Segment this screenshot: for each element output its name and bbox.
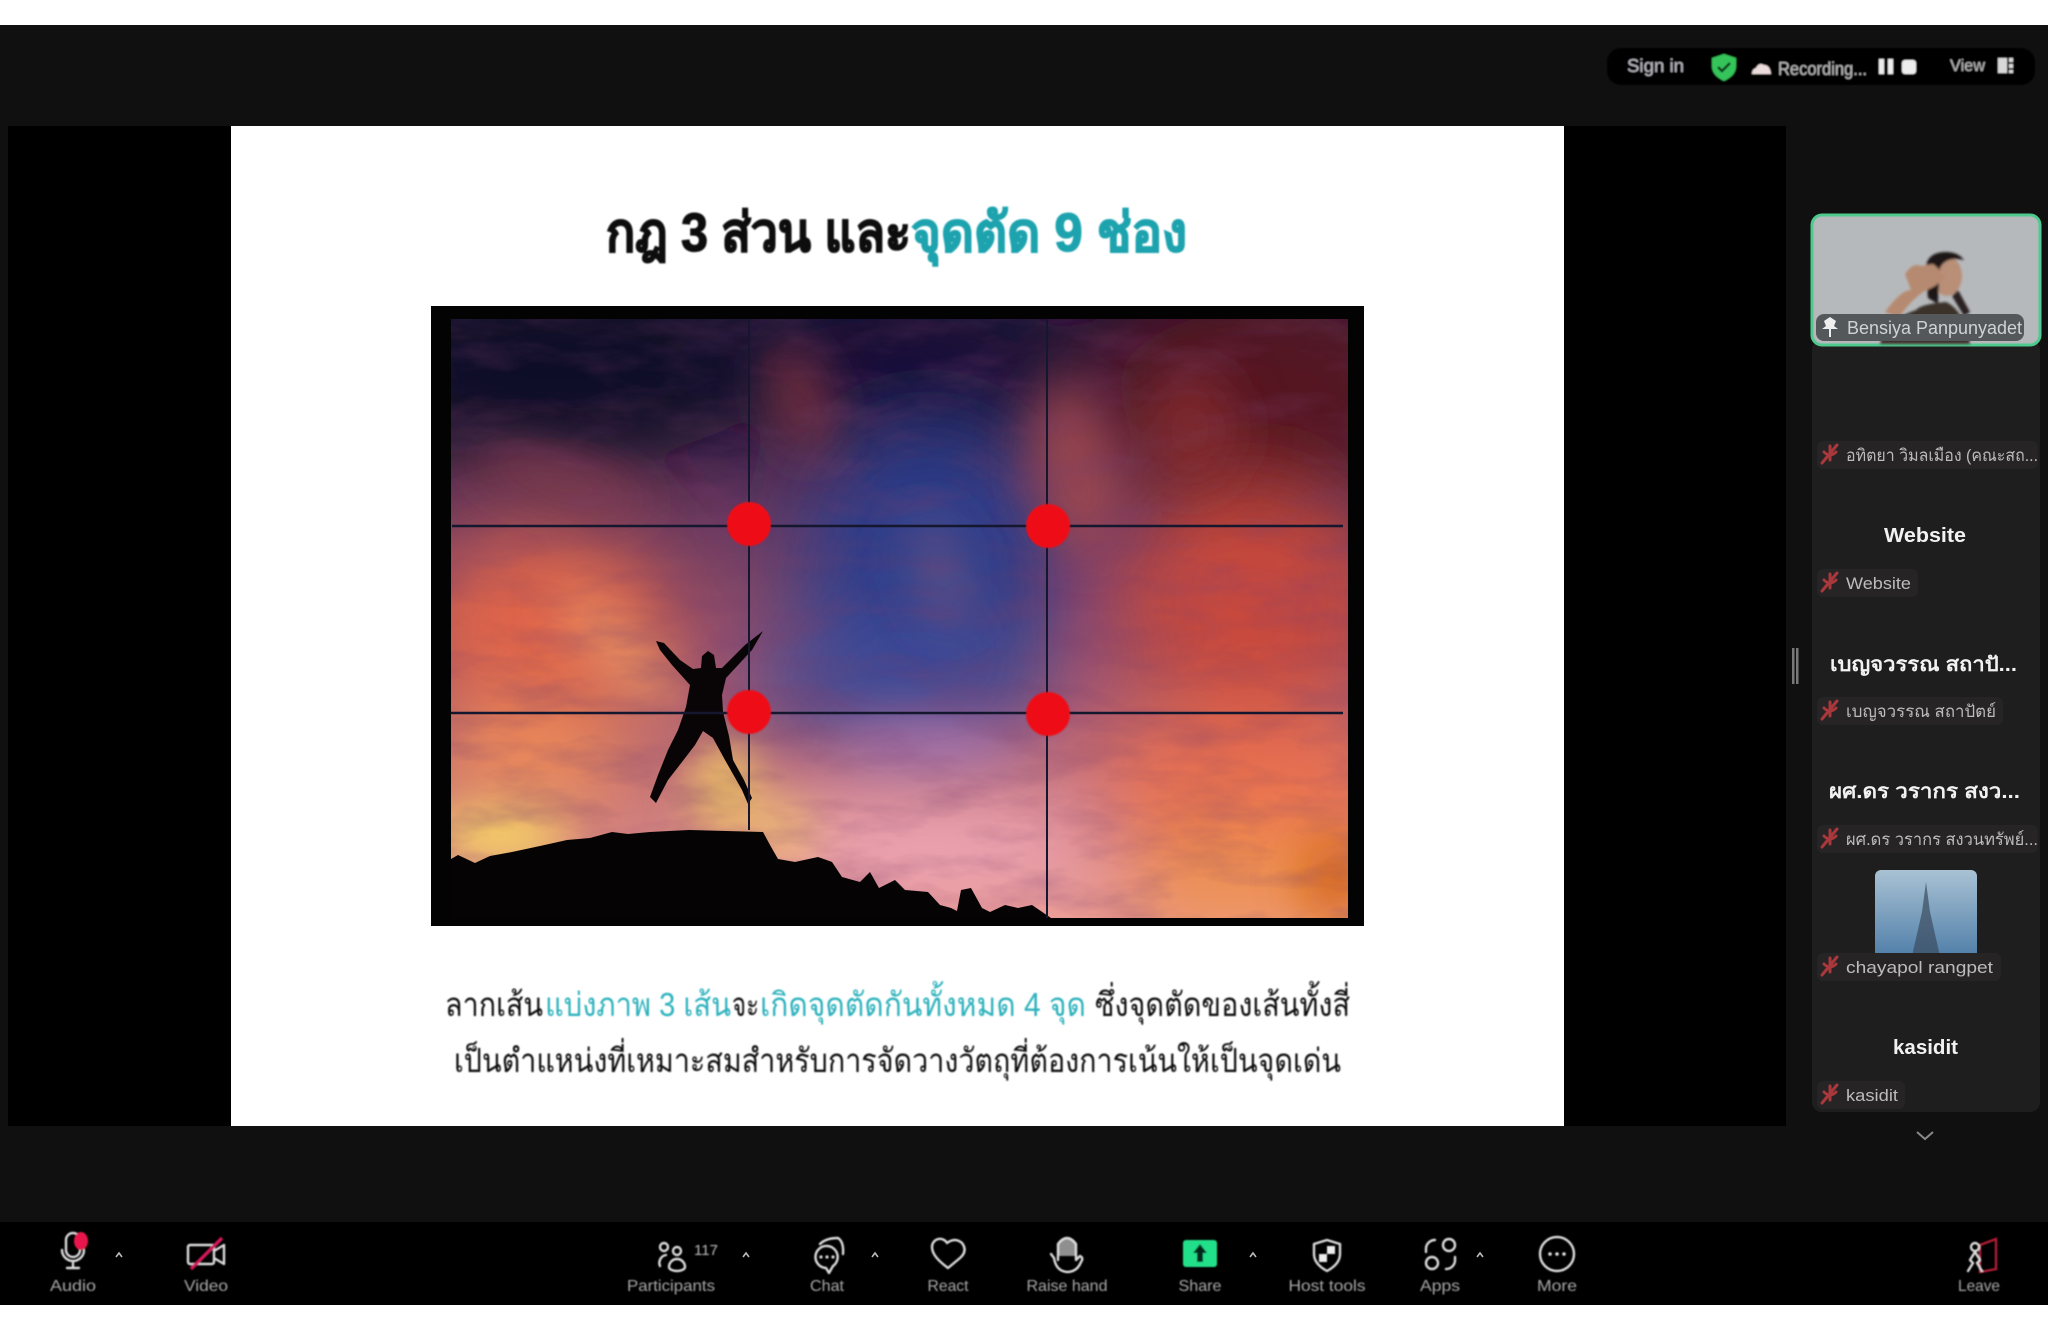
video button	[184, 1238, 228, 1295]
top status bar	[1607, 48, 2035, 85]
slide title: กฎ 3 ส่วน และ	[606, 203, 911, 263]
hill silhouette	[451, 830, 1051, 925]
share caret	[1250, 1253, 1256, 1257]
view label: View	[1950, 56, 1986, 75]
audio button	[50, 1232, 96, 1295]
slide panel	[231, 126, 1564, 1126]
pinned speaker video	[1812, 215, 2040, 345]
participant tile: Warakorn: ผศ.ดร วรากร สงว...	[1829, 781, 2020, 803]
participant tile: Benjawan: เบญจวรรณ สถาปั...	[1830, 654, 2017, 676]
chat button	[810, 1238, 845, 1295]
thirds grid lines	[451, 319, 1343, 918]
recording label: Recording...	[1778, 59, 1867, 79]
participant tile: Atittaya: อทิตยา วิมลเมือง (คณะสถ...	[1846, 446, 2038, 465]
slide caption: จะ	[732, 986, 759, 1023]
chat button: Chat	[810, 1278, 845, 1295]
slide caption	[445, 981, 1350, 1081]
participant tile: chayapol	[1817, 870, 2001, 981]
react button	[928, 1239, 969, 1295]
shared screen area	[8, 126, 1786, 1126]
participants button: 117	[694, 1242, 718, 1259]
participant tile: chayapol: chayapol rangpet	[1846, 958, 1993, 977]
sign in: Sign in	[1627, 56, 1684, 76]
react button: React	[928, 1278, 969, 1295]
share button	[1178, 1240, 1222, 1295]
participant tile: kasidit: kasidit	[1846, 1086, 1898, 1105]
splitter handle	[1792, 648, 1798, 684]
participants caret	[743, 1253, 749, 1257]
cloud texture	[451, 319, 1348, 918]
host tools button	[1288, 1240, 1366, 1295]
slide title	[606, 203, 1187, 267]
chat caret	[872, 1253, 878, 1257]
participant tile: kasidit: kasidit	[1893, 1037, 1958, 1059]
icon: scroll down chevron	[1917, 1132, 1933, 1139]
icon: stop	[1902, 60, 1916, 74]
participant tile: Website: Website	[1884, 525, 1966, 547]
bottom toolbar	[0, 1222, 2048, 1305]
slide caption: เป็นตำแหน่งที่เหมาะสมสำหรับการจัดวางวัตถุที่ต้องการเน้นให้เป็นจุดเด่น	[454, 1038, 1341, 1081]
participant tile: Website	[1817, 525, 1966, 597]
leave button: Leave	[1958, 1278, 2000, 1295]
raise hand button: Raise hand	[1026, 1278, 1108, 1295]
apps button	[1420, 1239, 1460, 1295]
slide caption: แบ่งภาพ 3 เส้น	[545, 986, 731, 1023]
participant tile: Warakorn: ผศ.ดร วรากร สงวนทรัพย์...	[1846, 830, 2038, 849]
icon: security shield	[1712, 54, 1736, 81]
speaker name tag	[1816, 314, 2024, 341]
audio button: Audio	[50, 1278, 96, 1295]
participant tile: Benjawan	[1817, 654, 2017, 725]
slide caption: ลากเส้น	[445, 986, 543, 1023]
apps caret	[1477, 1253, 1483, 1257]
participants button: Participants	[627, 1278, 715, 1295]
speaker name tag: Bensiya Panpunyadet	[1847, 318, 2022, 338]
jumping person silhouette	[650, 631, 763, 804]
icon: cloud recording	[1752, 64, 1771, 74]
photo: rule of thirds sunset	[431, 306, 1364, 926]
icon: pause	[1879, 59, 1893, 74]
icon: view grid	[1998, 58, 2013, 73]
slide caption: ซึ่งจุดตัดของเส้นทั้งสี่	[1095, 981, 1350, 1025]
leave button	[1958, 1239, 2000, 1295]
host tools button: Host tools	[1288, 1278, 1366, 1295]
video button: Video	[184, 1278, 228, 1295]
participant tile: Website: Website	[1846, 574, 1911, 593]
share button: Share	[1178, 1278, 1222, 1295]
apps button: Apps	[1420, 1278, 1460, 1295]
participant tile: kasidit	[1817, 1037, 1958, 1109]
audio caret	[116, 1253, 122, 1257]
participant tile: Warakorn	[1817, 781, 2038, 853]
participant tile: Atittaya	[1817, 441, 2038, 469]
avatar: tower photo	[1875, 870, 1977, 958]
participants panel	[1812, 215, 2040, 1112]
participants button	[627, 1242, 718, 1295]
speaker figure	[1880, 252, 1970, 344]
sunset sky	[451, 319, 1348, 918]
more button: More	[1537, 1278, 1577, 1295]
slide title: จุดตัด 9 ช่อง	[911, 203, 1187, 267]
slide caption: เกิดจุดตัดกันทั้งหมด 4 จุด	[760, 981, 1086, 1025]
raise hand button	[1026, 1237, 1108, 1295]
participant tile: Benjawan: เบญจวรรณ สถาปัตย์	[1846, 702, 1996, 721]
more button	[1537, 1237, 1577, 1295]
red intersection dots	[727, 502, 1070, 736]
